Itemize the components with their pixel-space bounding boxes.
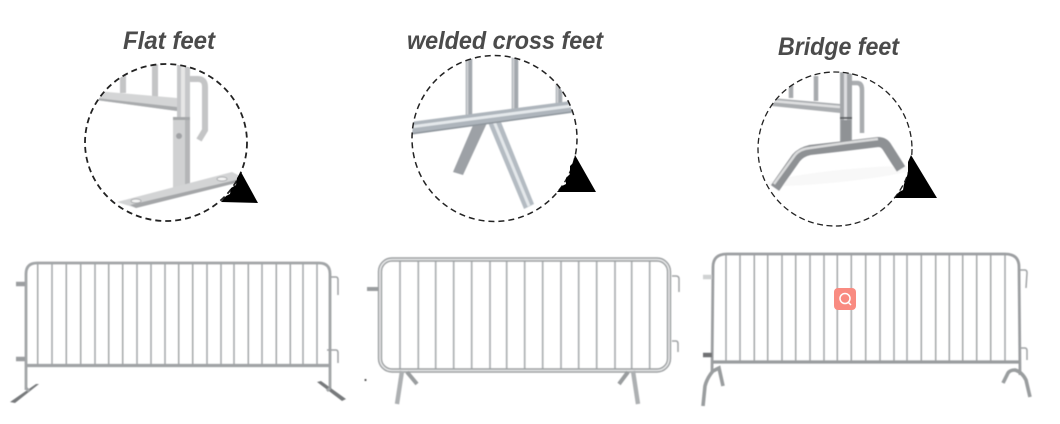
barrier: flat feet (10, 263, 346, 403)
heading: Flat feet: Flat feet (123, 27, 217, 55)
frame (26, 263, 330, 390)
heading: Bridge feet: Bridge feet (778, 33, 901, 61)
dashed outline (85, 64, 247, 221)
barrier: welded cross feet (364, 259, 679, 404)
side tab and hooks (367, 287, 378, 291)
stray mark (364, 379, 366, 381)
bridge feet (703, 368, 1030, 406)
upright bars (726, 254, 1005, 361)
icon: search badge (834, 288, 856, 310)
detail circle: bridge feet (758, 70, 937, 226)
black triangle (557, 155, 596, 192)
bottom rail (26, 364, 330, 367)
side tabs and hooks (703, 275, 712, 279)
frame (380, 260, 669, 370)
heading: welded cross feet: welded cross feet (407, 27, 605, 55)
flat feet (10, 384, 39, 403)
detail circle: flat feet (85, 60, 258, 221)
dashed outline (758, 72, 912, 226)
dashed outline (412, 56, 577, 222)
side tabs and hooks (16, 284, 25, 359)
upright bars (400, 259, 650, 370)
black triangle (221, 172, 258, 203)
frame (712, 254, 1020, 375)
bottom rail (712, 360, 1020, 364)
upright bars (38, 263, 317, 364)
barrier: bridge feet (703, 254, 1030, 406)
black triangle (895, 155, 937, 198)
cross feet (407, 372, 628, 384)
detail circle: welded cross feet (410, 55, 596, 222)
